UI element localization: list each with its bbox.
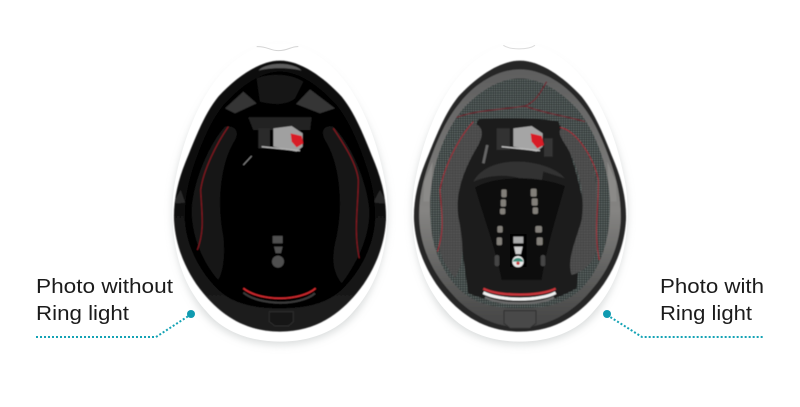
- label: photo without ring light: [36, 276, 173, 325]
- interior: [414, 61, 626, 332]
- white shell: [172, 43, 388, 342]
- interior: [174, 61, 386, 332]
- cheek stitching right: [333, 128, 359, 258]
- left cheek pad: [439, 123, 482, 278]
- forehead pad seam: [457, 82, 585, 122]
- centre perforated pad: [475, 178, 565, 280]
- cheek stitching left: [437, 122, 473, 252]
- chin tab: [269, 312, 293, 326]
- chin strap buckle: [243, 117, 312, 165]
- dark visor opening: [414, 61, 626, 332]
- chin strap buckle: [483, 126, 553, 163]
- helmet shadow: [412, 50, 628, 345]
- forehead highlight: [258, 64, 302, 71]
- side visor strip right: [607, 162, 617, 202]
- leader line left: [36, 310, 195, 337]
- left vent mesh: [225, 92, 257, 113]
- right cheek pad: [323, 126, 369, 283]
- label: photo without ring light: Ring light: [36, 303, 129, 325]
- helmet shadow: [172, 50, 388, 345]
- inner lining: [185, 72, 375, 308]
- leader line right: [603, 310, 763, 337]
- side visor strip left: [423, 162, 433, 202]
- black visor opening: [174, 61, 386, 332]
- forehead mesh: [257, 75, 303, 104]
- side hinge left: [175, 190, 185, 203]
- left cheek pad: [192, 126, 237, 280]
- label: photo with ring light: Photo with: [660, 276, 764, 298]
- helmet: photo with ring light: [412, 43, 628, 345]
- label: photo with ring light: Ring light: [660, 303, 752, 325]
- right cheek pad: [560, 127, 597, 275]
- inner lining mesh: [430, 78, 610, 308]
- certification labels: [510, 234, 527, 267]
- neck roll trim: [483, 289, 556, 303]
- side hinge right: [373, 190, 385, 203]
- snap buttons: [495, 189, 545, 266]
- label: photo with ring light: [660, 276, 764, 325]
- central dark liner: [457, 118, 584, 304]
- neck roll red trim: [243, 288, 316, 298]
- certification labels: [272, 236, 284, 268]
- neck flap: [473, 162, 565, 192]
- top vent: [257, 47, 298, 51]
- top vent: [503, 45, 535, 49]
- cheek stitching left: [197, 127, 228, 250]
- white shell: [412, 43, 628, 342]
- label: photo without ring light: Photo without: [36, 276, 173, 298]
- helmet: photo without ring light: [172, 43, 388, 345]
- cheek stitching right: [560, 127, 599, 260]
- chin tab: [504, 311, 536, 328]
- right vent mesh: [296, 89, 335, 113]
- grey rim: [419, 69, 621, 327]
